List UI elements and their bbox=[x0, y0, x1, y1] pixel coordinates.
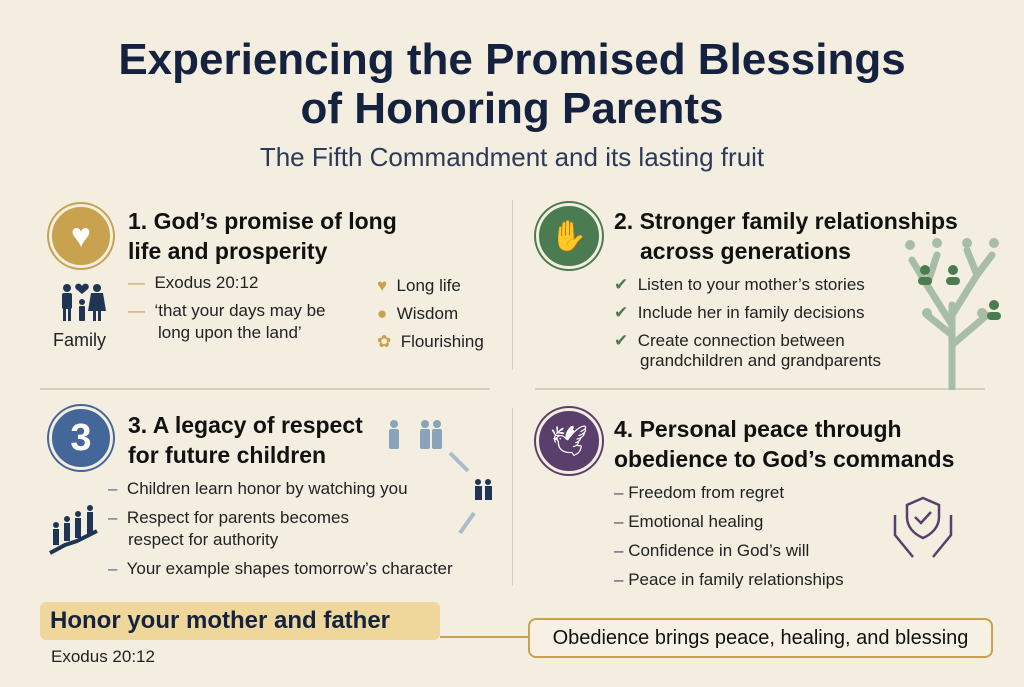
panel 1: long upon the land’ bbox=[158, 323, 302, 342]
reference: Exodus 20:12 bbox=[51, 647, 155, 666]
title bbox=[118, 35, 906, 133]
benefit list: ✿ Flourishing bbox=[377, 332, 484, 351]
icon: heart circle: ♥ bbox=[71, 216, 91, 254]
heading 1 bbox=[128, 208, 397, 264]
label family: Family bbox=[53, 330, 106, 350]
bottom highlight: Honor your mother and father bbox=[50, 607, 390, 634]
benefit list: ● Wisdom bbox=[377, 304, 458, 323]
bullets 4 bbox=[614, 483, 844, 589]
subtitle: The Fifth Commandment and its lasting fruit bbox=[260, 142, 764, 172]
panel 1 bbox=[47, 202, 484, 351]
panel 2 bbox=[534, 201, 1001, 390]
heading 2: across generations bbox=[640, 238, 851, 264]
generations icon bbox=[389, 420, 492, 534]
heading 4: obedience to God’s commands bbox=[614, 446, 954, 472]
icon: family bbox=[62, 284, 106, 321]
dividers bbox=[512, 200, 513, 370]
panel 4 bbox=[534, 406, 954, 589]
panel 3 bbox=[47, 404, 492, 578]
icon: dove circle: 🕊 bbox=[550, 424, 588, 458]
callout: Obedience brings peace, healing, and blessing bbox=[553, 627, 968, 649]
callout bbox=[528, 618, 993, 658]
heading 3: for future children bbox=[128, 442, 326, 468]
heading 2 bbox=[614, 208, 958, 264]
heading 4 bbox=[614, 416, 954, 472]
title: Experiencing the Promised Blessings bbox=[118, 35, 906, 84]
icon: hands circle: ✋ bbox=[550, 220, 588, 252]
bullets: — Exodus 20:12 bbox=[128, 273, 258, 292]
connector bbox=[440, 636, 530, 638]
icon: number 3: 3 bbox=[70, 416, 92, 458]
panel 3: respect for authority bbox=[128, 530, 278, 549]
heading 1: 1. God’s promise of long bbox=[128, 208, 397, 234]
panel 3: – Your example shapes tomorrow’s character bbox=[108, 559, 453, 578]
bullets 4: – Emotional healing bbox=[614, 512, 763, 531]
benefit list bbox=[377, 276, 484, 351]
bullets 3: – Children learn honor by watching you bbox=[108, 479, 408, 498]
heading 2: 2. Stronger family relationships bbox=[614, 208, 958, 234]
heading 3: 3. A legacy of respect bbox=[128, 412, 363, 438]
bullets 4: – Confidence in God’s will bbox=[614, 541, 809, 560]
checklist: ✔ Create connection between bbox=[614, 331, 845, 350]
checklist: ✔ Include her in family decisions bbox=[614, 303, 864, 322]
checklist: ✔ Listen to your mother’s stories bbox=[614, 275, 865, 294]
panel 3: – Respect for parents becomes bbox=[108, 508, 349, 527]
icon: number 3 bbox=[49, 406, 113, 470]
icon: heart circle bbox=[49, 204, 113, 268]
bottom highlight bbox=[40, 602, 440, 640]
panel 2: grandchildren and grandparents bbox=[640, 351, 881, 370]
tree bbox=[905, 238, 1001, 390]
title: of Honoring Parents bbox=[301, 84, 723, 133]
icon: dove circle bbox=[536, 408, 602, 474]
icon: hands circle bbox=[536, 203, 602, 269]
heading 3 bbox=[128, 412, 363, 468]
icon: shield hands bbox=[894, 496, 952, 558]
bullets 4: – Freedom from regret bbox=[614, 483, 784, 502]
checklist bbox=[614, 275, 865, 350]
climbing family icon bbox=[49, 505, 98, 555]
bullets 4: – Peace in family relationships bbox=[614, 570, 844, 589]
panel 1: — ‘that your days may be bbox=[128, 301, 325, 320]
heading 1: life and prosperity bbox=[128, 238, 327, 264]
benefit list: ♥ Long life bbox=[377, 276, 461, 295]
heading 4: 4. Personal peace through bbox=[614, 416, 902, 442]
